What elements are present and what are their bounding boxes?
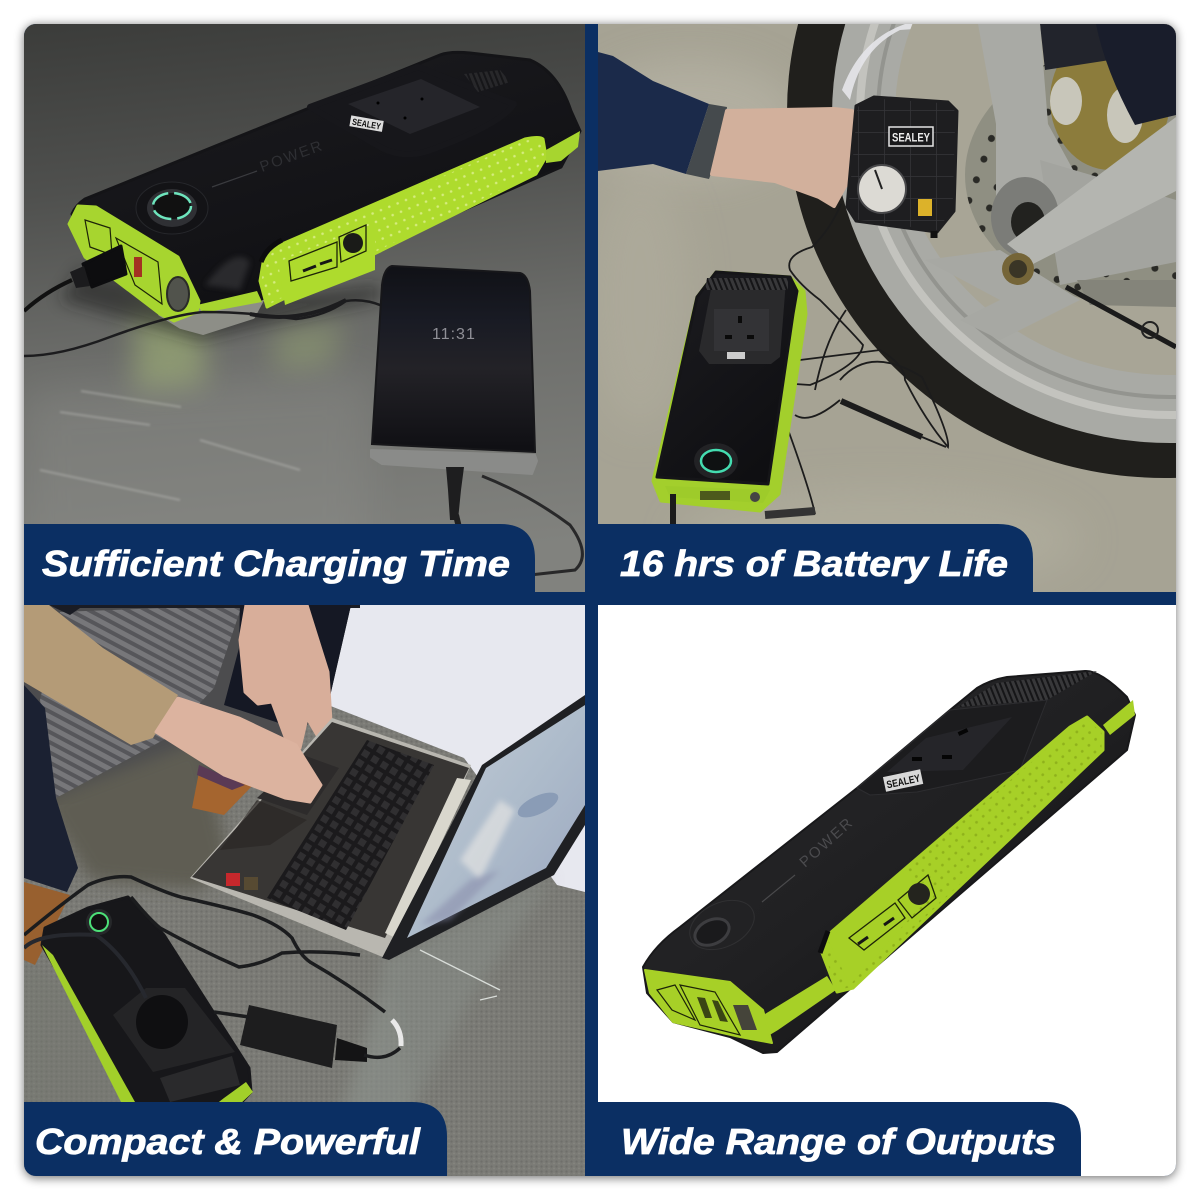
icon: open laptop bbox=[190, 695, 585, 1000]
caption: Sufficient Charging Time: Sufficient Charging Time bbox=[42, 543, 510, 584]
icon: cables on floor bbox=[788, 244, 949, 514]
icon: motorcycle wheel bbox=[787, 24, 1176, 478]
swingarm bbox=[1007, 117, 1176, 264]
strip: navy divider at panel bottoms bbox=[598, 592, 1176, 605]
thin green band bbox=[765, 976, 836, 1036]
icon: cables bbox=[24, 280, 385, 356]
icon: power adapter and cables bbox=[24, 877, 401, 1068]
icon: smartphone: 11:31 bbox=[432, 326, 476, 343]
panel: laptop on glass table bbox=[24, 605, 585, 1176]
touchpad bbox=[257, 755, 339, 815]
icon: power pack on table: SEALEY bbox=[351, 117, 382, 132]
front green face bbox=[645, 970, 772, 1043]
icon: sleeve and hand bbox=[598, 52, 863, 206]
dotted green grip bbox=[260, 138, 546, 307]
icon: typing hand bbox=[156, 698, 321, 802]
green front face bbox=[69, 206, 199, 321]
ports panel bbox=[828, 872, 935, 985]
caption: Wide Range of Outputs bbox=[586, 1102, 1081, 1176]
usb plug bbox=[83, 246, 126, 287]
brake disc bbox=[965, 65, 1176, 298]
button bbox=[690, 900, 754, 950]
icon: power pack standing on floor bbox=[653, 272, 815, 524]
spokes bbox=[978, 24, 1073, 196]
caption: Compact & Powerful bbox=[24, 1102, 447, 1176]
panel: charging a phone bbox=[24, 24, 585, 592]
keyboard bbox=[267, 740, 434, 930]
icon: power pack product bbox=[643, 671, 1135, 1053]
caption: Compact & Powerful: Compact & Powerful bbox=[35, 1121, 421, 1162]
icon: seated person and hands bbox=[24, 605, 360, 965]
icon: power pack with plug bbox=[24, 897, 253, 1105]
panel: product shot on white bbox=[598, 605, 1176, 1176]
caption: 16 hrs of Battery Life: 16 hrs of Battery Life bbox=[620, 543, 1008, 584]
icon: power pack on table bbox=[69, 52, 580, 333]
dotted grip bbox=[822, 717, 1103, 992]
front ports bbox=[85, 220, 112, 255]
panel: tyre inflation scene bbox=[598, 24, 1176, 592]
caption: 16 hrs of Battery Life bbox=[598, 524, 1033, 592]
socket plate bbox=[857, 700, 1047, 795]
icon: tyre compressor: SEALEY bbox=[892, 130, 930, 144]
caption: Wide Range of Outputs: Wide Range of Outputs bbox=[621, 1121, 1056, 1162]
gap through wheel bbox=[896, 24, 1176, 375]
icon: tyre compressor bbox=[847, 97, 957, 238]
green lower band bbox=[199, 291, 262, 311]
grill bbox=[958, 671, 1097, 707]
body bbox=[643, 671, 1135, 1053]
caption: Sufficient Charging Time bbox=[24, 524, 535, 592]
icon: power pack product: SEALEY bbox=[886, 773, 921, 791]
ring button bbox=[136, 182, 208, 234]
icon: power pack product: POWER bbox=[796, 814, 857, 871]
icon: power pack on table: POWER bbox=[258, 137, 326, 176]
socket plate bbox=[307, 79, 376, 108]
icon: smartphone bbox=[371, 266, 582, 575]
